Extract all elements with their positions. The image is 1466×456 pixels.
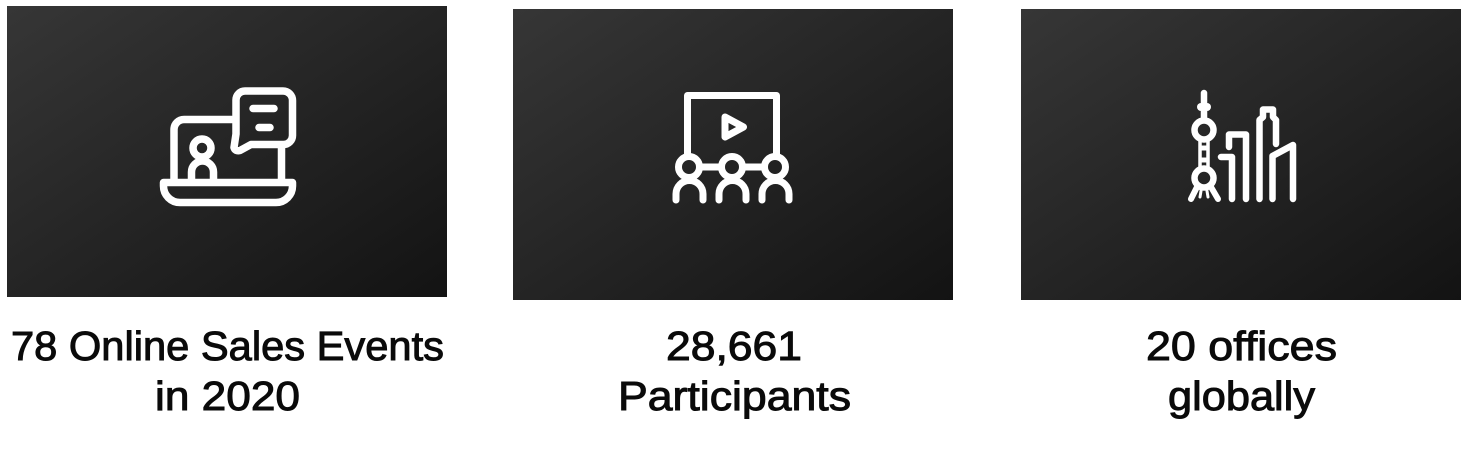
panel: offices (1021, 9, 1461, 419)
card background (1021, 9, 1461, 300)
caption (618, 323, 851, 419)
panel: online sales events (7, 6, 447, 419)
caption: Participants (618, 373, 851, 419)
caption (1146, 323, 1337, 419)
caption: 28,661 (666, 323, 802, 369)
icon: city skyline (1191, 93, 1293, 199)
caption: 20 offices (1146, 323, 1337, 369)
caption (11, 323, 444, 419)
card background (7, 6, 447, 297)
caption: globally (1168, 373, 1316, 419)
icon: laptop with presenter and speech bubble (164, 91, 292, 202)
panel: participants (513, 9, 953, 419)
card background (513, 9, 953, 300)
icon: audience watching a screen (676, 96, 789, 200)
caption: in 2020 (155, 373, 300, 419)
caption: 78 Online Sales Events (11, 323, 444, 369)
